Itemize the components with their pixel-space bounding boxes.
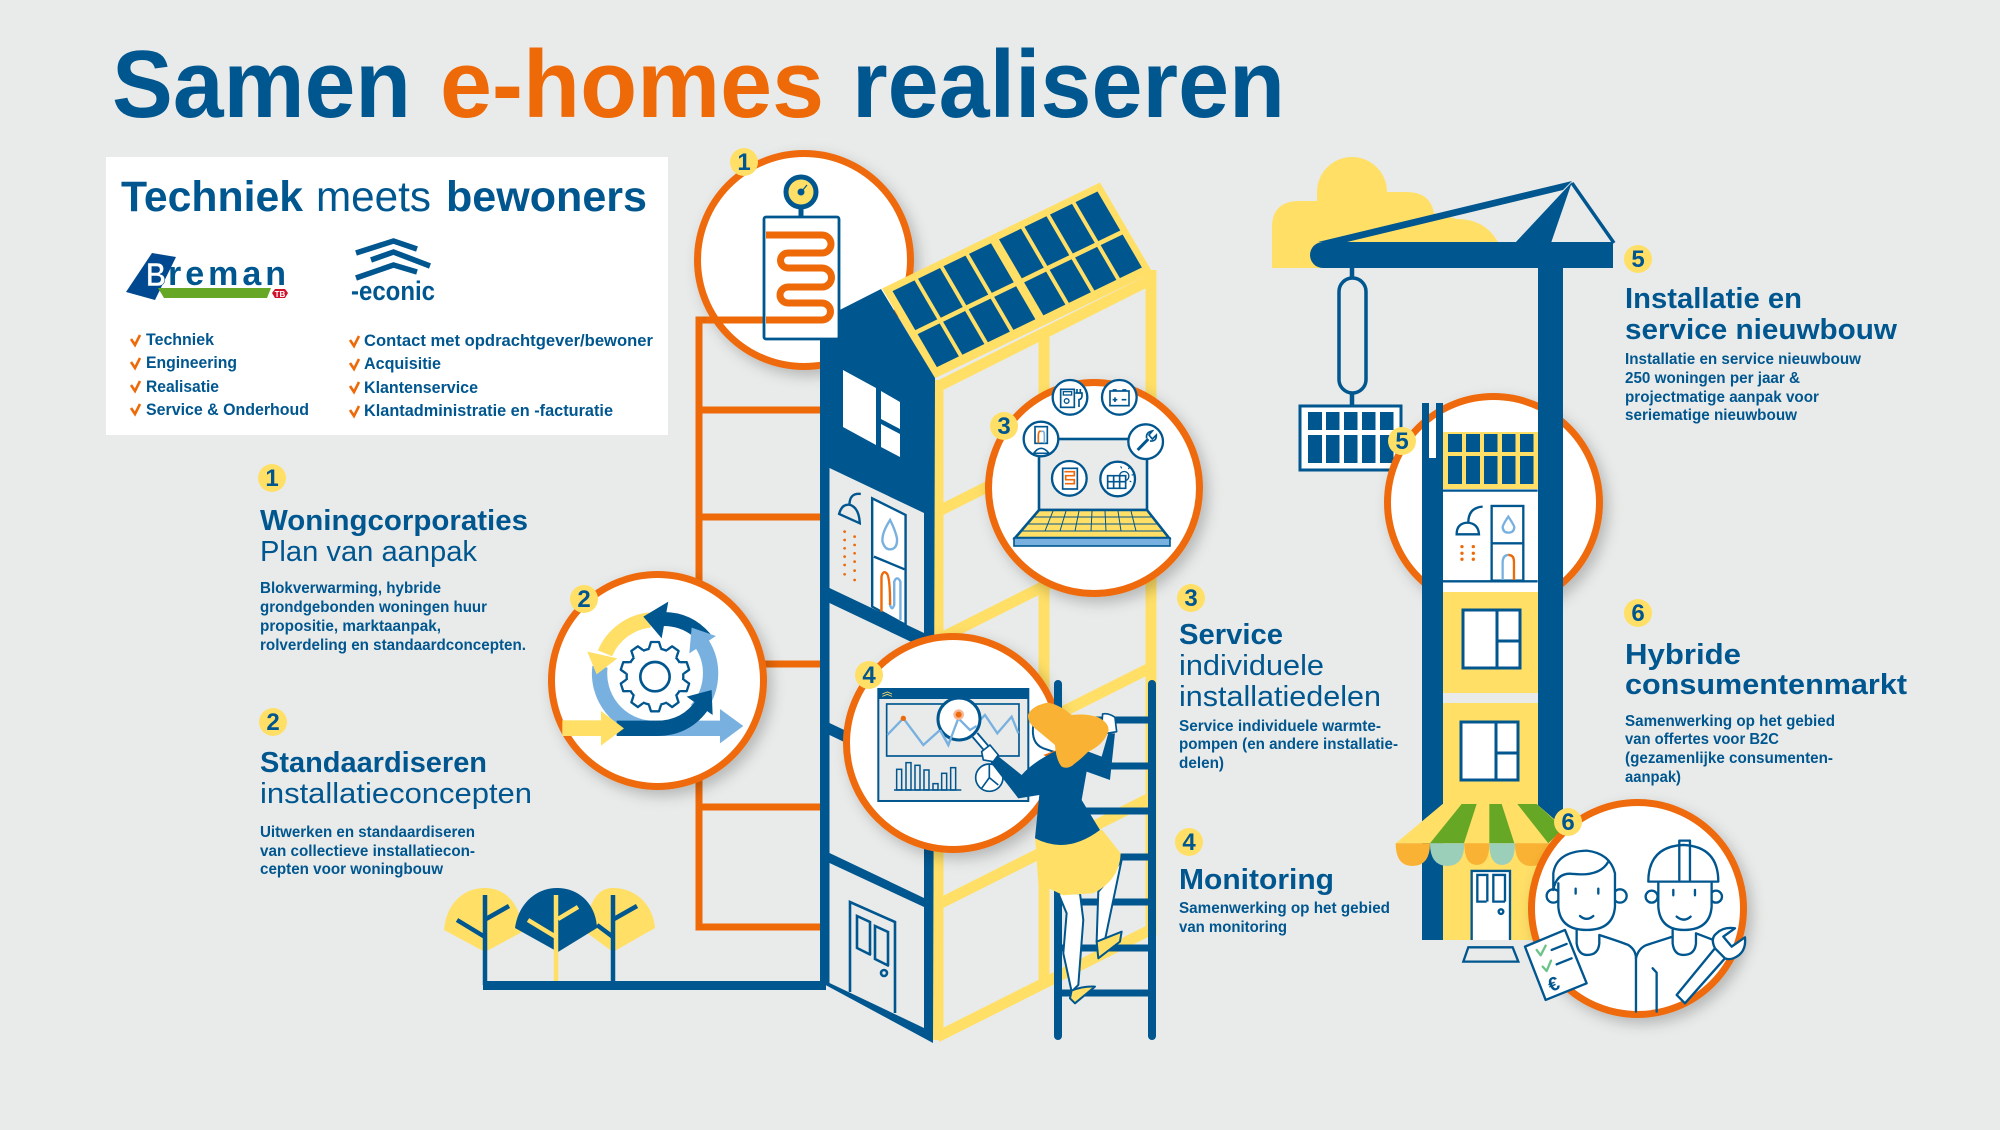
text block 6: hybride consumentenmarkt: aanpak) — [1625, 769, 1681, 786]
text block 5: installatie en service nieuwbouw: service nieuwbouw — [1625, 314, 1897, 346]
logo: Breman: TB — [275, 290, 286, 299]
list: Breman: Engineering — [146, 354, 237, 372]
house facade — [820, 289, 935, 1043]
text block 3: service: Service individuele warmte- — [1179, 718, 1381, 735]
icon: coil — [1052, 461, 1087, 496]
circle 2: standaardiseren cycle: 2 — [577, 586, 591, 613]
text block 6: hybride consumentenmarkt: Hybride — [1625, 639, 1741, 671]
text block 3: service — [1177, 584, 1398, 772]
shop door and step — [1463, 871, 1518, 962]
front door — [850, 902, 895, 1013]
house window — [843, 370, 900, 457]
pipe inside circle 1 — [706, 316, 765, 324]
icon: wrench — [1128, 424, 1163, 459]
clipboard quote: € — [1545, 973, 1563, 997]
text block 5: installatie en service nieuwbouw — [1624, 245, 1897, 424]
text block 6: hybride consumentenmarkt: 6 — [1631, 600, 1645, 627]
list: econic: Acquisitie — [364, 355, 441, 373]
orange pipe ladder — [699, 320, 822, 927]
icon: wrench — [1677, 928, 1745, 1003]
text block 2: standaardiseren: Standaardiseren — [260, 747, 487, 779]
text block 3: service: installatiedelen — [1179, 681, 1381, 713]
gear — [620, 642, 690, 711]
crane jib — [1310, 181, 1614, 268]
circle 2: standaardiseren cycle — [552, 574, 764, 786]
circle 1: boiler background — [698, 154, 910, 366]
logo: econic — [351, 241, 435, 306]
text block 2: standaardiseren: cepten voor woningbouw — [260, 861, 444, 878]
circle 4: monitoring dashboard — [846, 636, 1060, 850]
laptop — [1014, 439, 1170, 546]
text block 5: installatie en service nieuwbouw: 250 woningen per jaar & — [1625, 370, 1800, 387]
text block 2: standaardiseren — [259, 708, 532, 878]
badge 5 on panel — [1388, 427, 1416, 455]
text block 6: hybride consumentenmarkt — [1624, 599, 1907, 786]
house windows — [1461, 610, 1520, 780]
text block 1: woningcorporaties: Blokverwarming, hybride — [260, 580, 441, 597]
crane hook and hanging solar panel — [1300, 268, 1401, 470]
logo: econic: -econic — [351, 276, 435, 306]
text block 4: monitoring: Monitoring — [1179, 864, 1334, 896]
text block 1: woningcorporaties: grondgebonden woningen huur — [260, 599, 487, 616]
badge 5 on panel: 5 — [1395, 428, 1409, 455]
title: e-homes — [440, 31, 824, 138]
list: econic: Klantadministratie en -facturatie — [364, 402, 613, 420]
text block 1: woningcorporaties: rolverdeling en standaardconcepten. — [260, 637, 526, 654]
panel heading — [121, 173, 647, 221]
ladder — [1058, 684, 1152, 1036]
building frame: yellow structure — [937, 270, 1151, 1040]
list: Breman: Service & Onderhoud — [146, 401, 309, 419]
clipboard quote — [1525, 930, 1587, 1000]
text block 6: hybride consumentenmarkt: van offertes voor B2C — [1625, 731, 1779, 748]
text block 4: monitoring: van monitoring — [1179, 919, 1287, 936]
text block 6: hybride consumentenmarkt: (gezamenlijke consumenten- — [1625, 750, 1833, 767]
badge 1 — [730, 148, 758, 176]
panel: techniek meets bewoners — [106, 157, 668, 435]
text block 3: service: delen) — [1179, 755, 1224, 772]
circle 6: consumers and installer — [1525, 802, 1745, 1014]
crane — [1272, 157, 1614, 470]
text block 1: woningcorporaties: 1 — [265, 465, 279, 492]
list: econic: Contact met opdrachtgever/bewoner — [364, 332, 654, 350]
circle 4: monitoring dashboard: 4 — [862, 662, 876, 689]
bathroom: shower and boiler cabinet — [839, 494, 906, 625]
text block 2: standaardiseren: Uitwerken en standaardiseren — [260, 824, 475, 841]
shop awning — [1396, 804, 1567, 866]
text block 2: standaardiseren: installatieconcepten — [260, 778, 532, 810]
list: econic: Klantenservice — [364, 379, 478, 397]
person: consumer — [1547, 851, 1636, 1012]
panel heading: bewoners — [446, 173, 647, 221]
new build solar roof — [1443, 432, 1538, 489]
icon: house boiler — [1024, 422, 1058, 456]
text block 5: installatie en service nieuwbouw: projectmatige aanpak voor — [1625, 389, 1819, 406]
text block 4: monitoring — [1175, 828, 1390, 936]
text block 1: woningcorporaties — [258, 464, 528, 654]
panel heading: Techniek — [121, 173, 303, 221]
text block 1: woningcorporaties: Woningcorporaties — [260, 505, 528, 537]
title: Samen — [112, 31, 411, 138]
circle 3: laptop service: 3 — [997, 413, 1011, 440]
list: Breman: Realisatie — [146, 378, 219, 396]
new build house body and crane towers — [1396, 268, 1567, 962]
logo: Breman: B — [146, 256, 166, 293]
panel heading: meets — [316, 173, 431, 221]
text block 4: monitoring: 4 — [1182, 829, 1196, 856]
magnifier — [938, 698, 991, 753]
badge 1: 1 — [737, 149, 751, 176]
text block 1: woningcorporaties: propositie, marktaanpak, — [260, 618, 441, 635]
text block 5: installatie en service nieuwbouw: seriematige nieuwbouw — [1625, 407, 1798, 424]
icon: battery — [1102, 380, 1137, 415]
text block 3: service: 3 — [1184, 585, 1198, 612]
text block 4: monitoring: Samenwerking op het gebied — [1179, 900, 1390, 917]
solar panels on roof — [882, 183, 1153, 378]
text block 5: installatie en service nieuwbouw: Installatie en service nieuwbouw — [1625, 351, 1862, 368]
woman on ladder — [982, 703, 1122, 1003]
text block 1: woningcorporaties: Plan van aanpak — [260, 536, 477, 568]
person: installer — [1636, 841, 1722, 1012]
list: Breman — [131, 331, 309, 419]
circle 5: new build house — [1388, 396, 1600, 608]
text block 6: hybride consumentenmarkt: consumentenmarkt — [1625, 669, 1907, 701]
list: econic — [350, 332, 654, 420]
text block 3: service: pompen (en andere installatie- — [1179, 736, 1398, 753]
cloud — [1272, 157, 1503, 268]
text block 5: installatie en service nieuwbouw: Installatie en — [1625, 283, 1802, 315]
text block 3: service: individuele — [1179, 650, 1324, 682]
title: realiseren — [852, 31, 1285, 138]
text block 5: installatie en service nieuwbouw: 5 — [1631, 246, 1645, 273]
text block 2: standaardiseren: 2 — [266, 709, 280, 736]
icon: solar and sun — [1100, 462, 1135, 496]
text block 3: service: Service — [1179, 619, 1283, 651]
new build bathroom — [1443, 491, 1538, 581]
logo: Breman: reman — [168, 255, 286, 293]
boiler icon — [764, 177, 839, 339]
text block 6: hybride consumentenmarkt: Samenwerking op het gebied — [1625, 713, 1835, 730]
title — [112, 31, 1285, 138]
circle 3: laptop service — [988, 380, 1200, 594]
text block 2: standaardiseren: van collectieve installatiecon- — [260, 843, 475, 860]
trees and ground line — [444, 888, 826, 986]
logo: Breman — [126, 253, 288, 300]
list: Breman: Techniek — [146, 331, 215, 349]
icon: heat pump — [1053, 380, 1087, 415]
circle 6: consumers and installer: 6 — [1561, 809, 1575, 836]
dashboard screen — [878, 689, 1028, 801]
